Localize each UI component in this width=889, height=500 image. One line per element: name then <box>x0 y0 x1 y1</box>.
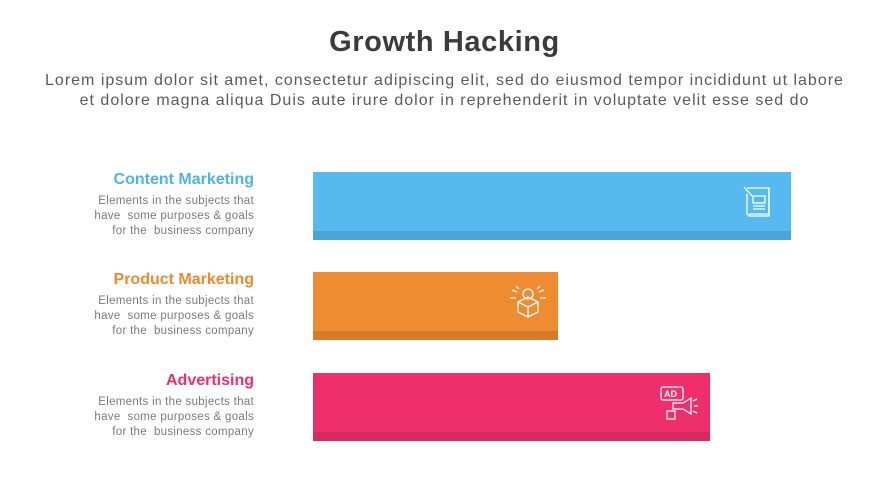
icon: ad megaphone <box>660 386 698 420</box>
bar: advertising <box>313 373 710 441</box>
label: advertising <box>94 372 254 438</box>
bar: content marketing <box>313 172 791 240</box>
label: advertising: Advertising <box>166 372 254 389</box>
subtitle <box>45 72 844 109</box>
label: advertising: have some purposes & goals <box>94 411 254 423</box>
title: Growth Hacking <box>329 26 560 58</box>
label: content marketing: have some purposes & goals <box>94 210 254 222</box>
label: content marketing: Elements in the subjects that <box>98 195 254 207</box>
icon: document <box>744 186 770 217</box>
label: product marketing: for the business company <box>112 325 254 337</box>
label: product marketing <box>94 271 254 337</box>
label: advertising: Elements in the subjects that <box>98 396 254 408</box>
label: product marketing: have some purposes & goals <box>94 310 254 322</box>
label: advertising: for the business company <box>112 426 254 438</box>
icon: box with gear <box>510 286 546 318</box>
label: product marketing: Elements in the subjects that <box>98 295 254 307</box>
subtitle: Lorem ipsum dolor sit amet, consectetur adipiscing elit, sed do eiusmod tempor incididunt ut labore <box>45 72 844 89</box>
icon: ad megaphone: AD <box>664 389 677 399</box>
label: content marketing <box>94 171 254 237</box>
subtitle: et dolore magna aliqua Duis aute irure dolor in reprehenderit in voluptate velit esse sed do <box>80 92 809 109</box>
label: content marketing: Content Marketing <box>114 171 254 188</box>
label: product marketing: Product Marketing <box>114 271 254 288</box>
bar: product marketing <box>313 272 558 340</box>
label: content marketing: for the business company <box>112 225 254 237</box>
